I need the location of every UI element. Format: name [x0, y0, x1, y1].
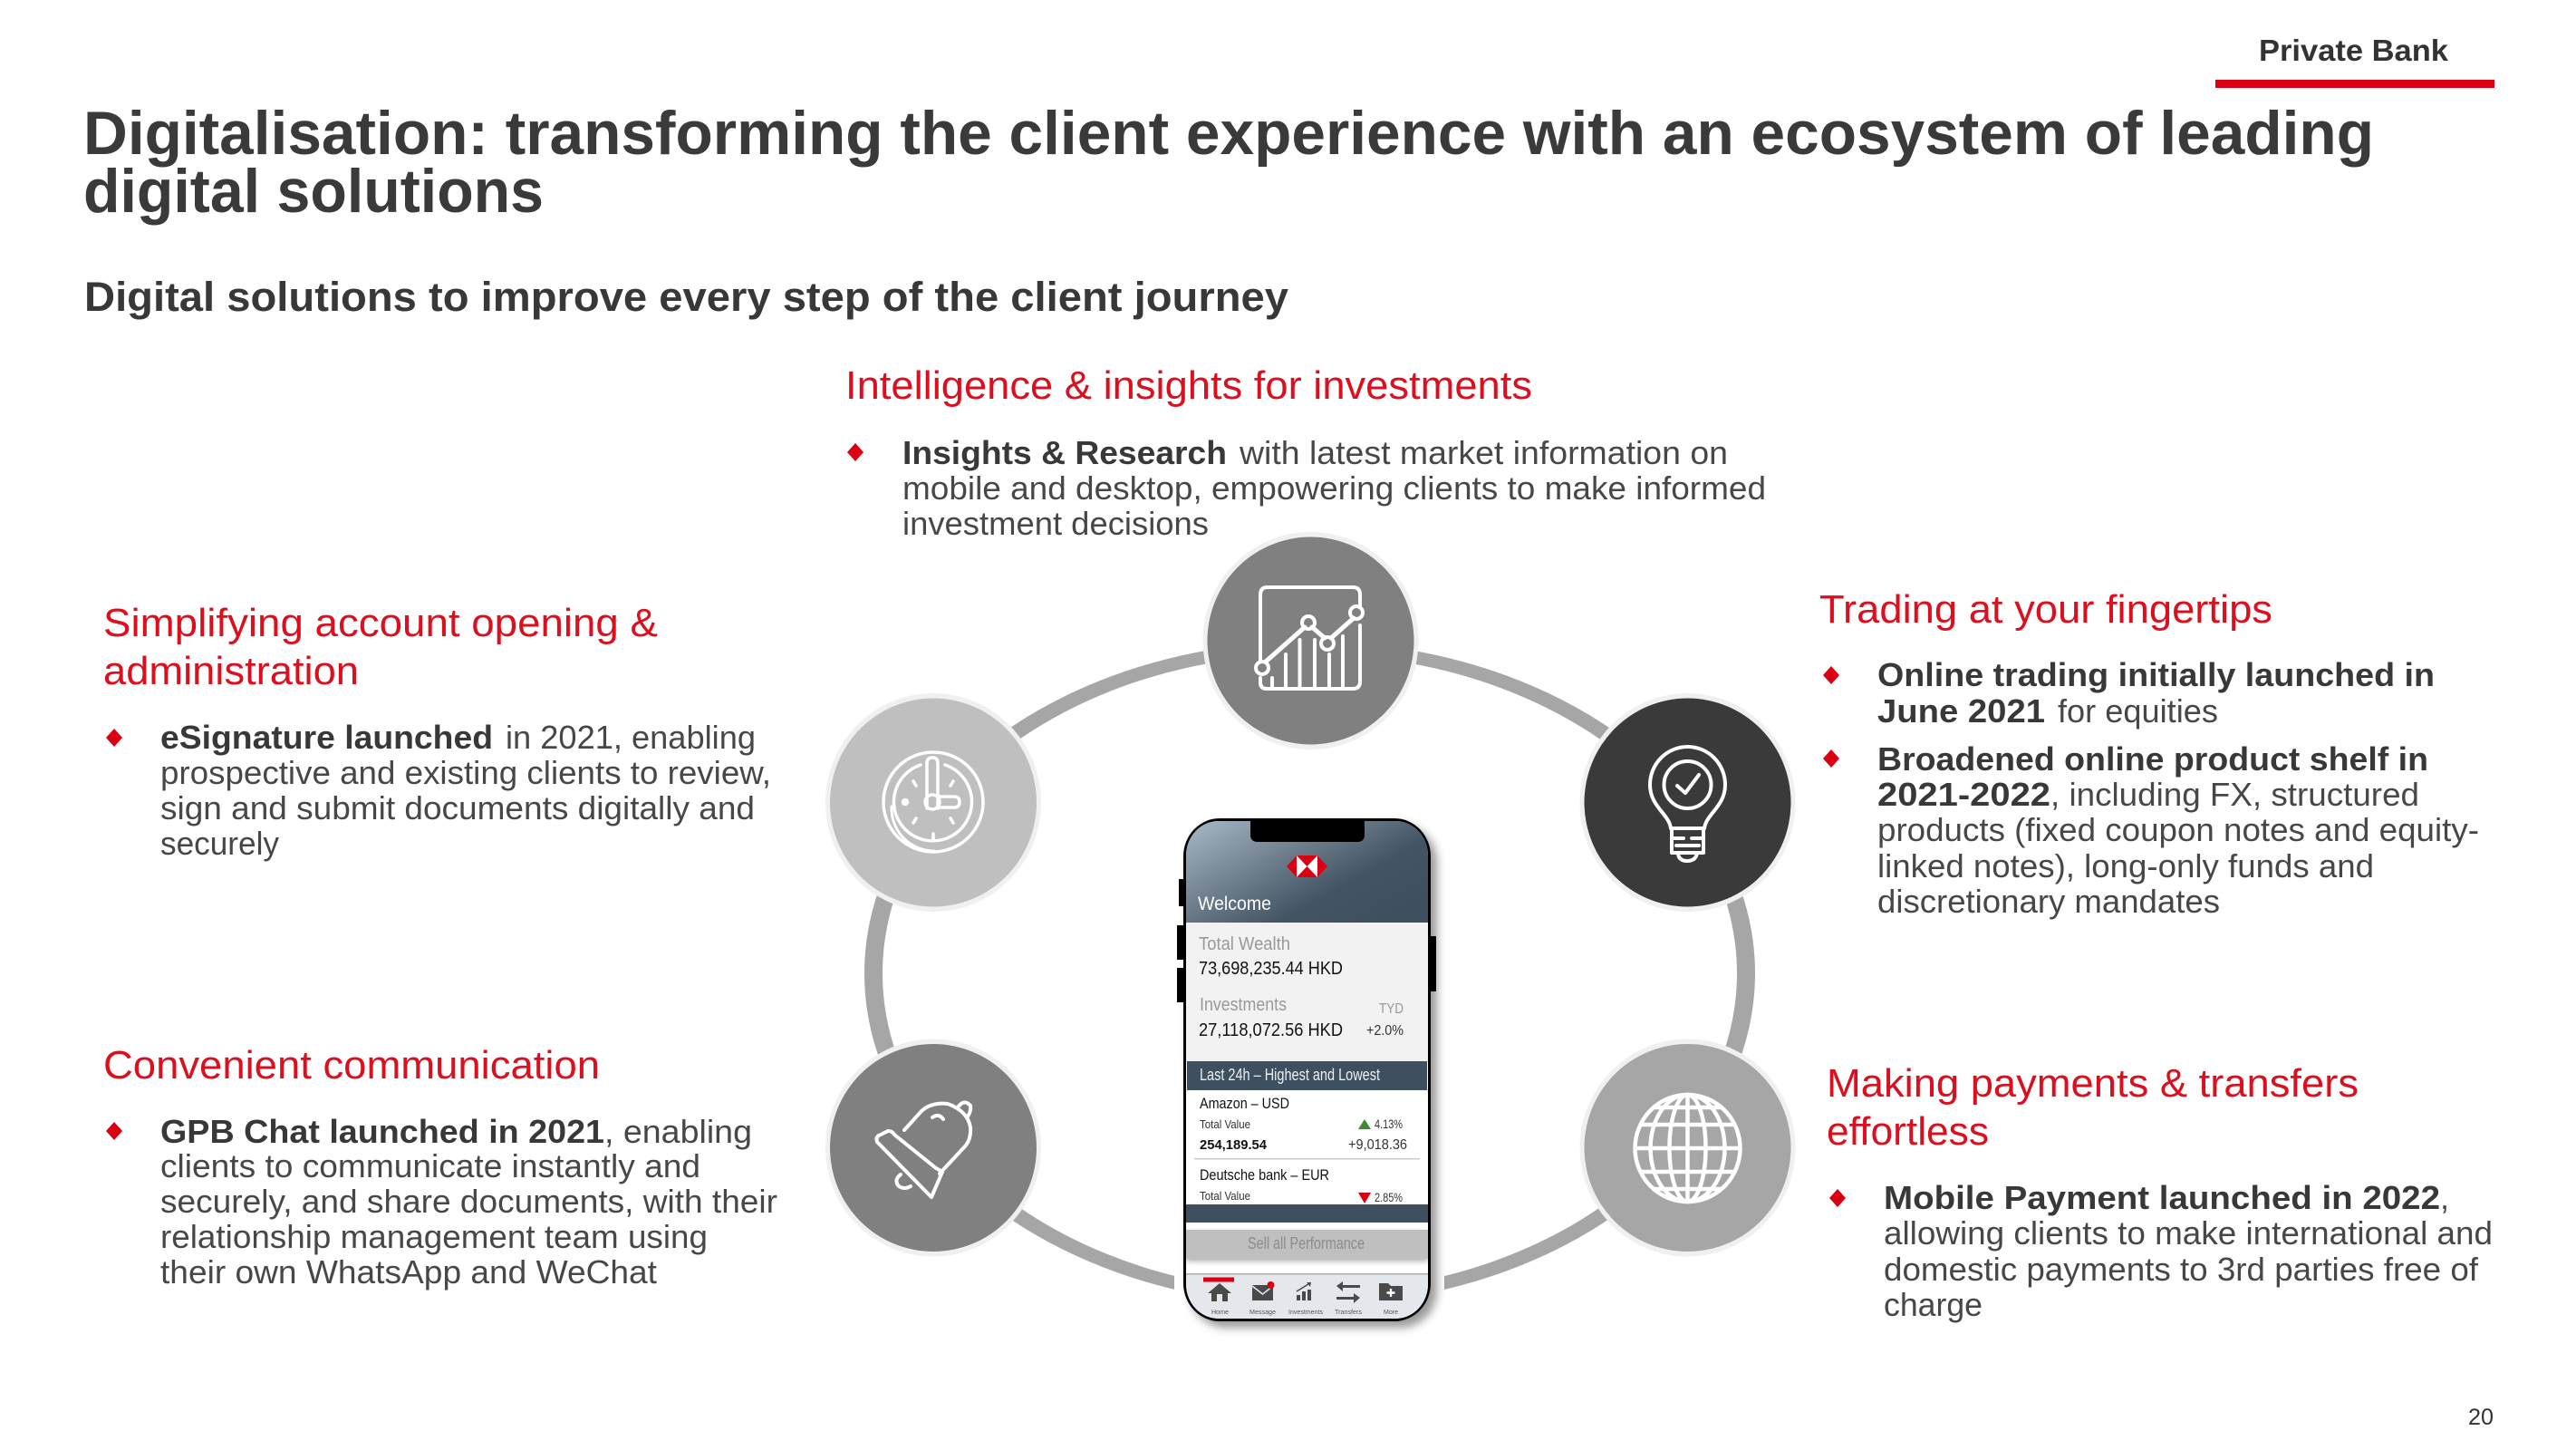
balances panel: Total Wealth	[1199, 934, 1290, 954]
icon: investments	[1297, 1282, 1311, 1300]
body text: GPB Chat: GPB Chat launched in 2021	[160, 1113, 604, 1150]
heading: payments: Making payments & transfers	[1827, 1061, 2359, 1106]
body text: eSignature: prospective and existing clients to review,	[160, 754, 771, 791]
body text: GPB Chat: their own WhatsApp and WeChat	[160, 1253, 657, 1290]
body text: online trading	[1877, 656, 2435, 730]
heading: trading: Trading at your fingertips	[1819, 587, 2272, 632]
sell button: Sell all Performance	[1248, 1234, 1365, 1252]
panel: trading	[1819, 587, 2479, 920]
icon: globe	[1635, 1095, 1740, 1202]
holdings list: 4.13%	[1375, 1116, 1403, 1131]
body text: GPB Chat: securely, and share documents, with their	[160, 1183, 777, 1220]
navigation bar	[1186, 1273, 1428, 1320]
balances panel: +2.0%	[1366, 1023, 1404, 1039]
nav labels: More	[1384, 1308, 1398, 1316]
heading: communication: Convenient communication	[103, 1043, 600, 1088]
nav labels: Home	[1211, 1308, 1229, 1316]
brand tag: Private Bank	[2215, 34, 2494, 88]
holdings list: +9,018.36	[1348, 1137, 1407, 1153]
panel: intelligence and insights	[845, 363, 1766, 542]
body text: insights	[902, 434, 1766, 542]
title	[83, 99, 2374, 226]
icon: message	[1252, 1281, 1274, 1300]
heading: intelligence: Intelligence & insights for investments	[845, 363, 1532, 408]
body text: product shelf: , including FX, structured	[2050, 776, 2419, 813]
body text: mobile payment: allowing clients to make international and	[1884, 1214, 2493, 1252]
heading: account opening: administration	[103, 649, 359, 693]
bullet marker	[1829, 1189, 1846, 1207]
bullet marker	[847, 443, 863, 461]
body text: mobile payment: ,	[2440, 1179, 2449, 1216]
body text: eSignature: sign and submit documents digitally and	[160, 789, 755, 826]
body text: product shelf: 2021-2022	[1877, 776, 2050, 813]
bullet marker	[106, 729, 122, 747]
welcome label: Welcome	[1198, 894, 1271, 914]
highest and lowest bar	[1187, 1061, 1427, 1090]
body text: insights: investment decisions	[902, 505, 1209, 542]
app header	[1186, 821, 1428, 923]
nav labels	[1212, 1309, 1398, 1316]
phone notch	[1250, 820, 1365, 842]
heading: account opening	[103, 601, 658, 693]
heading: payments: effortless	[1827, 1109, 1989, 1154]
body text: mobile payment: Mobile Payment launched in 2022	[1884, 1179, 2440, 1216]
holdings list: Deutsche bank – EUR	[1200, 1166, 1329, 1184]
HSBC logo	[1287, 856, 1327, 877]
balances panel	[1186, 923, 1428, 1061]
phone mockup	[1177, 818, 1436, 1321]
icon: transfers	[1336, 1281, 1360, 1303]
balances panel: Investments	[1200, 995, 1287, 1015]
title: digital solutions	[83, 157, 544, 226]
node: lightbulb icon	[1580, 693, 1796, 912]
body text: GPB Chat: clients to communicate instantly and	[160, 1147, 700, 1184]
body text: online trading: June 2021	[1877, 692, 2045, 730]
phone screen	[1186, 821, 1428, 1320]
holdings list: 254,189.54	[1200, 1137, 1268, 1153]
node: clock icon	[825, 693, 1041, 912]
node: chart icon	[1203, 532, 1419, 749]
body text: online trading: Online trading initially launched in	[1877, 656, 2435, 693]
panel: payments	[1827, 1061, 2493, 1323]
holdings list: Total Value	[1200, 1189, 1250, 1203]
heading: payments	[1827, 1061, 2359, 1154]
icon: bell	[877, 1102, 970, 1197]
title: Digitalisation: transforming the client experience with an ecosystem of leading	[83, 99, 2374, 168]
body text: eSignature: securely	[160, 825, 279, 862]
bullet marker	[106, 1122, 122, 1140]
heading: account opening: Simplifying account opening &	[103, 601, 658, 645]
body text: online trading: for equities	[2058, 692, 2218, 730]
body text: product shelf: linked notes), long-only funds and	[1877, 847, 2374, 884]
body text: mobile payment	[1884, 1179, 2493, 1323]
icon: lightbulb	[1650, 747, 1725, 861]
body text: product shelf: discretionary mandates	[1877, 883, 2220, 920]
body text: product shelf: Broadened online product shelf in	[1877, 740, 2428, 778]
body text: mobile payment: charge	[1884, 1286, 1983, 1323]
lower dark bar	[1186, 1204, 1428, 1223]
brand tag: Private Bank: Private Bank	[2259, 34, 2449, 67]
holdings list: Amazon – USD	[1200, 1095, 1289, 1112]
body text: product shelf	[1877, 740, 2479, 920]
icon: clock	[883, 752, 983, 852]
body text: mobile payment: domestic payments to 3rd parties free of	[1884, 1251, 2479, 1288]
balances panel: 73,698,235.44 HKD	[1199, 959, 1343, 979]
body text: product shelf: products (fixed coupon notes and equity-	[1877, 811, 2479, 848]
body text: eSignature: eSignature launched	[160, 719, 493, 756]
icon: line chart	[1256, 587, 1363, 689]
balances panel: 27,118,072.56 HKD	[1199, 1020, 1343, 1040]
body text: eSignature: in 2021, enabling	[506, 719, 756, 756]
body text: GPB Chat: , enabling	[604, 1113, 752, 1150]
panel: account opening	[103, 601, 771, 862]
sell button	[1186, 1230, 1428, 1259]
phone side buttons	[1177, 879, 1436, 1002]
body text: insights: mobile and desktop, empowering clients to make informed	[902, 469, 1766, 507]
body text: GPB Chat	[160, 1113, 777, 1290]
nav labels: Investments	[1288, 1308, 1323, 1316]
bullet marker	[1823, 749, 1839, 768]
body text: eSignature	[160, 719, 771, 862]
connecting ring	[864, 642, 1755, 1359]
holdings list: 2.85%	[1375, 1190, 1403, 1204]
subtitle: Digital solutions to improve every step of the client journey	[84, 274, 1288, 320]
body text: GPB Chat: relationship management team using	[160, 1218, 708, 1255]
balances panel: TYD	[1379, 1001, 1404, 1017]
body text: insights: Insights & Research	[902, 434, 1227, 471]
bullet marker	[1823, 666, 1839, 684]
phone body	[1183, 818, 1431, 1321]
nav labels: Transfers	[1335, 1308, 1362, 1316]
panel: communication	[103, 1043, 777, 1290]
icon: home	[1208, 1283, 1231, 1301]
body text: insights: with latest market information on	[1239, 434, 1728, 471]
node: bell icon	[825, 1039, 1041, 1256]
nav labels: Message	[1249, 1308, 1276, 1316]
holdings list: Total Value	[1200, 1117, 1250, 1131]
icon: folder	[1379, 1283, 1403, 1300]
page number: 20	[2468, 1405, 2494, 1430]
node: globe icon	[1580, 1039, 1796, 1256]
highest and lowest bar: Last 24h – Highest and Lowest	[1200, 1066, 1380, 1084]
holdings list	[1194, 1095, 1420, 1204]
